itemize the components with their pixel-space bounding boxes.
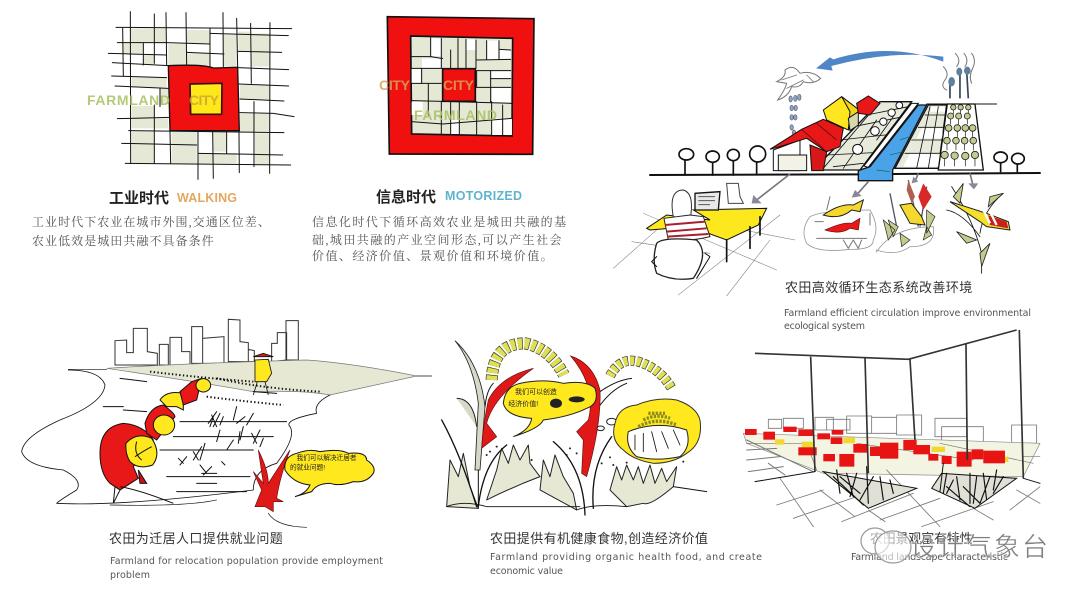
watermark text: 设计气象台	[910, 532, 1050, 562]
red plant	[253, 450, 290, 512]
hill	[107, 360, 417, 395]
label: city left: CITY	[379, 77, 411, 93]
farmer second	[145, 405, 175, 440]
farmland plane	[743, 433, 1040, 477]
rice stalk left	[455, 341, 485, 470]
english description: organic food: Farmland providing organic health food, and create	[490, 552, 762, 563]
plant with bird	[947, 183, 1010, 273]
canal	[858, 105, 927, 181]
grass and mounds	[447, 445, 677, 510]
icon: food in bubble	[550, 396, 585, 408]
red leaf left	[482, 368, 533, 448]
panel: industrial era walking: 农业低效是城田共融不具备条件	[32, 233, 215, 248]
heading: organic food: 农田提供有机健康食物,创造经济价值	[490, 531, 708, 546]
label: farmland: FARMLAND	[87, 92, 170, 108]
skyline	[115, 319, 298, 365]
rice ear right	[610, 361, 672, 388]
arrow: evaporation to cloud	[816, 51, 943, 71]
planted rice	[103, 378, 287, 492]
icon: rising vapor	[943, 53, 974, 98]
english description: ecosystem: Farmland efficient circulation improve environmental	[784, 308, 1031, 319]
arrows down	[752, 173, 978, 203]
left steps	[747, 440, 813, 475]
trees	[679, 146, 1024, 175]
body text: information era: 信息化时代下循环高效农业是城田共融的基	[312, 214, 568, 229]
frog and wetland plants	[877, 180, 935, 253]
panel: employment for relocated population: problem	[110, 570, 150, 581]
frame structure	[755, 330, 1023, 478]
planting beds	[823, 472, 1017, 508]
thought bubble	[597, 418, 617, 431]
panel: information era motorized	[312, 17, 568, 263]
field scribbles	[150, 372, 320, 405]
speech bubble text: 我们可以解决迁居者	[297, 453, 357, 462]
english description: employment: Farmland for relocation population provide employment	[110, 556, 383, 567]
heading: industrial era: 工业时代	[109, 190, 169, 207]
illustration: rice plants and thought bubbles: 经济价值!	[508, 399, 538, 408]
heading: employment: 农田为迁居人口提供就业问题	[109, 531, 283, 546]
body text: industrial era: 工业时代下农业在城市外围,交通区位差、	[32, 214, 271, 229]
farmland plots right	[895, 105, 947, 168]
icon: watermark logo	[861, 528, 911, 563]
panel: organic healthy food	[442, 341, 762, 577]
watermark	[861, 528, 1050, 563]
bowl of rice	[628, 425, 688, 459]
label: walking: WALKING	[177, 191, 237, 205]
speech bubble	[285, 450, 374, 497]
house and barns	[770, 96, 880, 171]
heading: ecosystem: 农田高效循环生态系统改善环境	[785, 280, 973, 295]
panel: organic healthy food: economic value	[490, 566, 563, 577]
panel: employment for relocated population	[22, 319, 432, 581]
panel: information era motorized: 价值、经济价值、景观价值和环境价值。	[312, 248, 554, 263]
english description: landscape: Farmland landscape characteristic	[851, 552, 1008, 563]
panel: efficient circulation ecosystem: ecological system	[784, 321, 865, 332]
long grass blades	[442, 420, 612, 515]
label: city center: CITY	[443, 77, 475, 93]
white path beside canal	[864, 103, 918, 167]
fish pond	[804, 197, 876, 250]
office worker at desk	[613, 183, 795, 296]
illustration: greenhouse perspective	[743, 330, 1040, 527]
panel: efficient circulation ecosystem	[613, 51, 1040, 332]
illustration: ecological cycle	[613, 51, 1040, 296]
illustration: rice plants and thought bubbles	[442, 341, 707, 515]
ground line	[650, 173, 1040, 175]
soil dots	[486, 446, 684, 466]
rice ear left	[492, 343, 564, 380]
tiled floor	[777, 470, 1040, 527]
panel: information era motorized: 础,城田共融的产业空间形态,可以产生社会	[312, 232, 563, 247]
illustration: farmers planting rice	[22, 319, 432, 527]
farmer front	[100, 423, 173, 503]
label: city: CITY	[189, 92, 220, 108]
label: farmland: FARMLAND	[414, 107, 497, 123]
label: motorized: MOTORIZED	[445, 189, 522, 203]
farmer third	[160, 378, 211, 410]
icon: cloud and rain	[777, 67, 821, 135]
diagram: city ring with farmland inside	[387, 17, 534, 154]
heading: landscape: 农田景观富有特性	[870, 531, 973, 546]
heading: information era: 信息时代	[376, 188, 436, 206]
red and yellow farm blocks	[745, 427, 1008, 467]
speech bubble	[503, 381, 596, 437]
panel: industrial era walking	[32, 12, 294, 248]
farmer standing	[253, 353, 273, 395]
illustration: farmers planting rice: 的就业问题!	[290, 462, 325, 471]
red leaf right	[571, 356, 600, 477]
farmland plots left	[813, 102, 912, 170]
diagram: city surrounded by farmland grid	[108, 12, 294, 179]
orchard	[938, 104, 983, 170]
panel: landscape characteristic	[743, 330, 1040, 563]
background buildings	[768, 415, 1037, 443]
speech bubble text: 我们可以创造	[515, 387, 557, 396]
